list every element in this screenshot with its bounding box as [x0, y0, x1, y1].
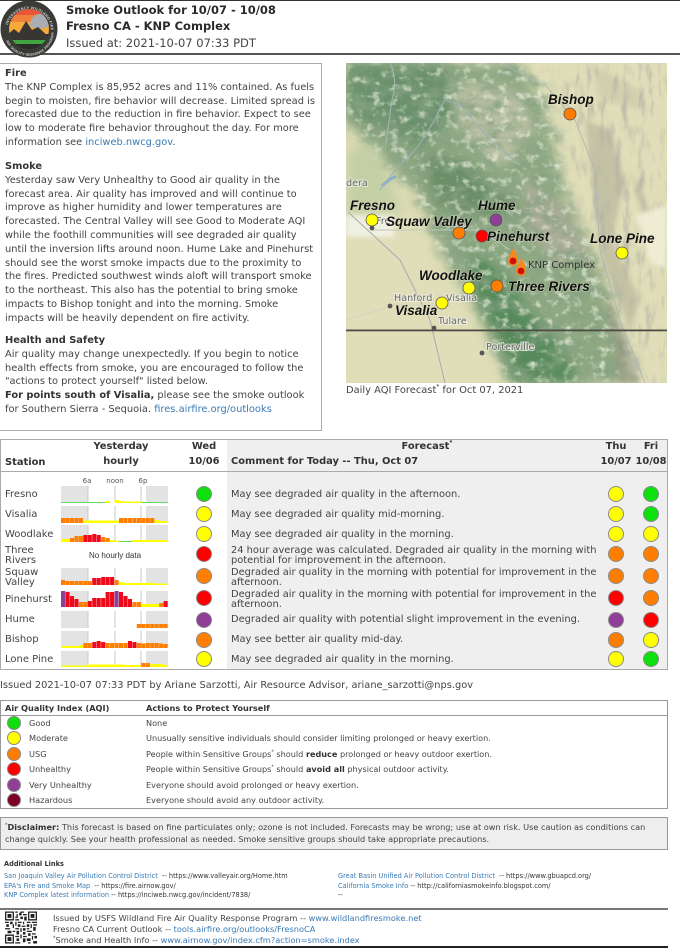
section: health and safety: for Southern Sierra - Sequoia. fires.airfire.org/outlooks	[5, 404, 272, 415]
place labels: Visalia	[446, 293, 477, 304]
station names: Woodlake	[5, 529, 53, 540]
legend row: hazardous	[7, 793, 324, 807]
links: right column: --	[338, 891, 343, 899]
panel: narrative text	[0, 63, 322, 431]
place labels	[346, 178, 535, 355]
section: fire	[4, 68, 315, 148]
daily comments: Degraded air quality with potential slight improvement in the evening.	[231, 614, 580, 625]
map: daily AQI forecast	[346, 63, 667, 383]
daily comments: May see degraded air quality in the morning.	[231, 529, 454, 540]
footer	[0, 908, 668, 948]
legend row: unhealthy: Unhealthy	[29, 764, 71, 774]
column: wed	[188, 441, 220, 467]
column: fri: 10/08	[635, 456, 667, 467]
daily comments: May see degraded air quality in the afternoon.	[231, 489, 460, 500]
legend row: moderate	[7, 731, 491, 745]
column: fri: Fri	[644, 441, 658, 452]
station names: Valley	[5, 577, 35, 588]
table header	[5, 440, 667, 468]
icon: program logo: AIR QUALITY RESPONSE PROGRAM	[6, 32, 54, 56]
station labels: Lone Pine	[590, 231, 655, 246]
bars: Squaw Valley	[61, 577, 168, 585]
panel: forecast table	[0, 439, 668, 670]
bars: Bishop	[61, 641, 168, 648]
footer text: Fresno CA Current Outlook -- tools.airfire.org/outlooks/FresnoCA	[53, 924, 315, 934]
section: smoke: until the inversion lifts around noon. Hume Lake and Pinehurst	[5, 244, 313, 255]
section: health and safety: Air quality may change unexpectedly. If you begin to notice	[5, 349, 299, 360]
links heading: Additional Links	[4, 860, 64, 868]
section: smoke: Yesterday saw Very Unhealthy to Good air quality in the	[5, 175, 280, 186]
place labels: dera	[346, 178, 368, 189]
station labels: Squaw Valley	[386, 214, 473, 229]
header rule	[1, 471, 667, 472]
title text block: Issued at: 2021-10-07 07:33 PDT	[66, 36, 256, 50]
bars: Hume	[137, 624, 168, 628]
map caption: Daily AQI Forecast* for Oct 07, 2021	[346, 384, 523, 396]
links: left column	[4, 872, 288, 899]
legend row: unhealthy	[7, 762, 449, 776]
links: right column: Great Basin Unified Air Pollution Control District -- https://www.gbuapcd.org/	[338, 872, 591, 880]
place labels: Hanford	[394, 293, 432, 304]
section: smoke: impacts will be heavily dependent on fire activity.	[5, 313, 250, 324]
daily comments	[231, 489, 596, 665]
footer text	[53, 913, 422, 945]
daily comments: May see degraded air quality mid-morning.	[231, 509, 444, 520]
station labels	[350, 92, 655, 318]
place labels: Tulare	[437, 316, 467, 327]
chart: yesterday hourly AQI: 6p	[139, 477, 148, 485]
links: left column: San Joaquin Valley Air Pollution Control District -- https://www.valleyair.org/Home.htm	[4, 872, 288, 880]
station labels: Pinehurst	[487, 229, 550, 244]
icon: fires	[508, 248, 526, 276]
station names: Rivers	[5, 555, 36, 566]
rivers and roads	[346, 62, 645, 383]
column: station: Station	[5, 457, 45, 468]
section: fire: The KNP Complex is 85,952 acres and 11% contained. As fuels	[5, 82, 314, 93]
section: smoke: improve as higher humidity and lower temperatures are	[5, 202, 282, 213]
station markers	[366, 108, 628, 309]
section: fire: forecasted due to the reduction in fire behavior. Expect to see	[5, 109, 311, 120]
links: left column: KNP Complex latest information -- https://inciweb.nwcg.gov/incident/7838/	[4, 891, 250, 899]
additional links	[4, 860, 592, 899]
daily comments: afternoon.	[231, 577, 282, 588]
daily comments: afternoon.	[231, 599, 282, 610]
column: thu	[600, 441, 632, 467]
station labels: Visalia	[395, 303, 438, 318]
bars: Woodlake	[61, 534, 168, 542]
Thu AQI circles	[608, 486, 624, 667]
chart: yesterday hourly AQI: 6a	[83, 477, 91, 485]
place labels: Fre	[376, 216, 391, 227]
column: yesterday: Yesterday	[94, 441, 148, 452]
bars: Pinehurst	[61, 591, 168, 607]
legend row: USG	[7, 747, 492, 761]
column: comment: Comment for Today -- Thu, Oct 07	[231, 456, 418, 467]
station labels: Fresno	[350, 198, 395, 213]
section: health and safety	[5, 335, 304, 415]
title text block	[66, 3, 276, 50]
state line	[346, 330, 667, 331]
links: left column: EPA's Fire and Smoke Map -- https://fire.airnow.gov/	[4, 882, 176, 890]
chart: yesterday hourly AQI: noon	[106, 477, 124, 485]
station labels: Three Rivers	[508, 279, 590, 294]
disclaimer box	[0, 817, 668, 850]
station labels: Woodlake	[419, 268, 483, 283]
legend row: USG: USG	[29, 749, 47, 759]
legend row: hazardous: Hazardous	[29, 795, 72, 805]
place labels: Porterville	[486, 342, 535, 353]
column: thu: 10/07	[600, 456, 632, 467]
section: smoke: Smoke	[5, 161, 42, 172]
legend row: hazardous: Everyone should avoid any outdoor activity.	[146, 795, 324, 805]
section: smoke: impacts to Bishop tonight and into the morning. Smoke	[5, 299, 278, 310]
legend header	[0, 701, 667, 716]
icon: QR code	[5, 912, 37, 944]
legend row: good	[7, 716, 167, 730]
station names: Fresno	[5, 489, 38, 500]
footer text: Issued by USFS Wildland Fire Air Quality Response Program -- www.wildlandfiresmoke.net	[53, 913, 422, 923]
section: smoke: while the foothill communities will see degraded air quality	[5, 230, 297, 241]
station names: Three	[5, 545, 34, 556]
legend row: USG: People within Sensitive Groups* should reduce prolonged or heavy outdoor exertion.	[146, 749, 492, 759]
column: forecast: Forecast*	[402, 440, 452, 452]
daily comments: May see degraded air quality in the morning.	[231, 654, 454, 665]
header band	[0, 0, 680, 55]
legend row: good: None	[146, 718, 167, 728]
column: wed: Wed	[192, 441, 216, 452]
forecast column shading	[227, 440, 667, 669]
section: fire: begin to moisten, fire behavior will decrease. Limited spread is	[5, 96, 315, 107]
fire label: KNP Complex	[528, 260, 595, 271]
station names: Squaw	[5, 567, 38, 578]
section: smoke: forecast area. Air quality has improved and will continue to	[5, 189, 297, 200]
legend row: good: Good	[29, 718, 51, 728]
station labels: Hume	[478, 198, 516, 213]
issued by line: Issued 2021-10-07 07:33 PDT by Ariane Sarzotti, Air Resource Advisor, ariane_sarzotti@nps.gov	[0, 680, 473, 691]
section: health and safety: "actions to protect yourself" listed below.	[5, 376, 208, 387]
column: wed: 10/06	[188, 456, 220, 467]
title text block: Fresno CA - KNP Complex	[66, 19, 230, 33]
station names: Bishop	[5, 634, 39, 645]
links: right column	[338, 872, 592, 899]
column: yesterday	[94, 441, 148, 467]
column: yesterday: hourly	[103, 456, 139, 467]
daily comments: 24 hour average was calculated. Degraded air quality in the morning with	[231, 545, 596, 556]
legend row: very unhealthy	[7, 778, 359, 792]
station labels: Bishop	[548, 92, 594, 107]
section: health and safety: Health and Safety	[5, 335, 105, 346]
daily comments: Degraded air quality in the morning with potential for improvement in the	[231, 589, 596, 600]
icon: program logo	[0, 1, 58, 58]
bars: Fresno	[61, 500, 168, 503]
section: health and safety: For points south of Visalia, please see the smoke outlook	[5, 390, 304, 401]
chart: yesterday hourly AQI	[61, 477, 168, 667]
legend row: very unhealthy: Everyone should avoid prolonged or heavy exertion.	[146, 780, 359, 790]
legend header: Air Quality Index (AQI)	[5, 703, 109, 713]
panel: AQI legend	[0, 700, 668, 809]
station names: Hume	[5, 614, 35, 625]
disclaimer box: change quickly. See your health professional as needed. Smoke sensitive groups should take appropriate precautions.	[5, 834, 489, 844]
station names: Lone Pine	[5, 654, 53, 665]
section: smoke: to the northeast. This also has the potential to bring smoke	[5, 285, 298, 296]
daily comments: May see better air quality mid-day.	[231, 634, 403, 645]
section: health and safety: health effects from smoke, you are encouraged to follow the	[5, 363, 303, 374]
legend header: Actions to Protect Yourself	[146, 703, 270, 713]
bars: Visalia	[61, 518, 168, 523]
Wed AQI circles	[196, 486, 212, 667]
section: smoke: should see the worst smoke impacts due to the proximity to	[5, 258, 301, 269]
title text block: Smoke Outlook for 10/07 - 10/08	[66, 3, 276, 17]
section: fire: low to moderate fire behavior throughout the day. For more	[5, 123, 299, 134]
daily comments: potential for improvement in the afternoon.	[231, 555, 446, 566]
bars: Lone Pine	[61, 663, 168, 667]
column: thu: Thu	[606, 441, 626, 452]
section: smoke: forecasted. The Central Valley will see Good to Moderate AQI	[5, 216, 305, 227]
icon: program logo: INTERAGENCY WILDLAND FIRE	[5, 6, 54, 30]
Fri AQI circles	[643, 486, 659, 667]
disclaimer box: *Disclaimer: This forecast is based on fine particulates only; ozone is not included. Forecasts may be wrong; use at own risk. Use caution as conditions can	[5, 822, 645, 832]
chart: yesterday hourly AQI: No hourly data	[89, 551, 142, 560]
section: smoke	[5, 161, 313, 324]
section: fire: information see inciweb.nwcg.gov.	[5, 137, 175, 148]
footer text: *Smoke and Health Info -- www.airnow.gov/index.cfm?action=smoke.index	[53, 935, 360, 945]
legend row: unhealthy: People within Sensitive Groups* should avoid all physical outdoor activity.	[146, 764, 449, 774]
column: fri	[635, 441, 667, 467]
legend row: very unhealthy: Very Unhealthy	[29, 780, 92, 790]
daily comments: Degraded air quality in the morning with potential for improvement in the	[231, 567, 596, 578]
section: fire: Fire	[5, 68, 27, 79]
legend row: moderate: Unusually sensitive individuals should consider limiting prolonged or heavy exertion.	[146, 733, 491, 743]
legend row: moderate: Moderate	[29, 733, 68, 743]
links: right column: California Smoke Info -- http://californiasmokeinfo.blogspot.com/	[338, 882, 551, 890]
station names: Visalia	[5, 509, 37, 520]
section: smoke: the fires. Predicted southwest winds aloft will transport smoke	[5, 271, 312, 282]
station names: Pinehurst	[5, 594, 52, 605]
station names	[4, 489, 53, 665]
